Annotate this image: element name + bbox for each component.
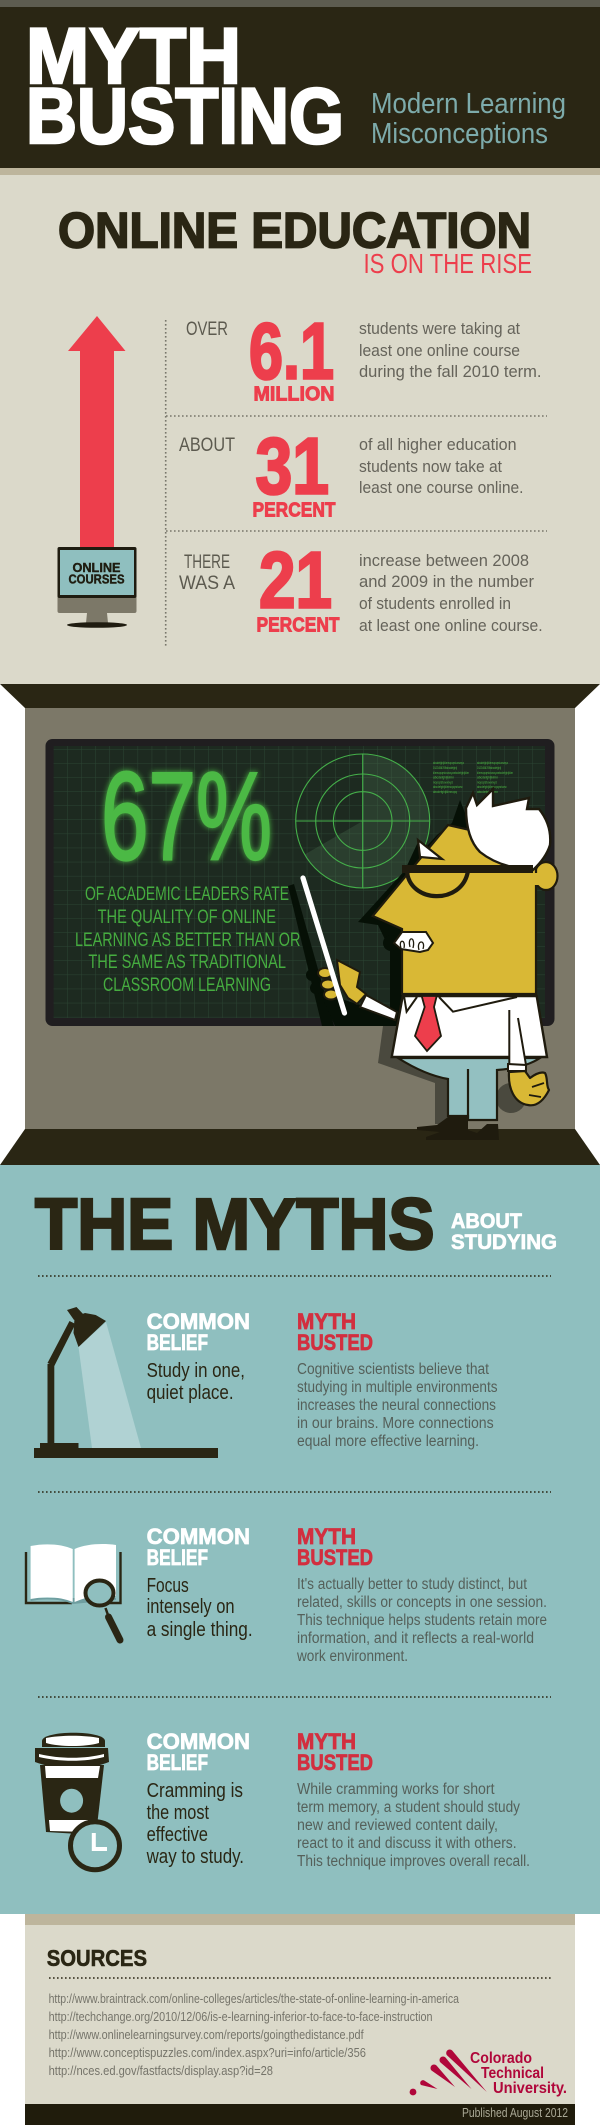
stat: 31 percent: ABOUT (179, 435, 235, 456)
title: BUSTING (26, 71, 344, 160)
busted text: work environment. (296, 1648, 408, 1665)
glasses (402, 865, 533, 896)
stat: 6.1 million: MILLION (254, 382, 334, 406)
busted text: increases the neural connections (297, 1397, 496, 1414)
small data text: abcdefghijklmn (477, 790, 498, 794)
arrow: rising (68, 316, 126, 548)
stat: 21 percent: and 2009 in the number (359, 573, 534, 591)
icon: coffee cup and clock (35, 1733, 120, 1870)
published date: Published August 2012 (462, 2105, 568, 2120)
belief text: effective (147, 1824, 208, 1846)
icon: desk lamp (34, 1307, 218, 1458)
subheading: about studying: ABOUT (451, 1210, 522, 1233)
stat: 31 percent: 31 (256, 422, 329, 510)
myth busted: MYTH (297, 1309, 356, 1334)
small data text: abcdefghijklmn (433, 776, 454, 780)
stat: 21 percent: PERCENT (256, 614, 340, 636)
stat: 6.1 million (186, 306, 542, 406)
head (373, 825, 536, 994)
panel: online education (0, 175, 600, 684)
ear (534, 862, 558, 890)
stat: 21 percent: of students enrolled in (359, 595, 511, 613)
icon: monitor (58, 547, 136, 628)
belief text: a single thing. (147, 1619, 253, 1641)
heading: the myths: THE MYTHS (35, 1185, 434, 1265)
small data text: abcdefghijklmnopq (433, 790, 457, 794)
source list (49, 1991, 460, 2078)
right sleeve (508, 1010, 526, 1071)
panel: myths (0, 1165, 600, 1914)
subheading: about studying (451, 1210, 557, 1254)
myth 1 (147, 1309, 498, 1450)
sources heading: SOURCES (47, 1945, 147, 1971)
logo: colorado technical university: Technical (481, 2065, 544, 2082)
stat: 6.1 million: least one online course (359, 342, 520, 360)
subtitle (371, 88, 566, 150)
myth busted: MYTH (297, 1524, 356, 1549)
board statement: LEARNING AS BETTER THAN OR (75, 930, 300, 951)
pointer stick (303, 878, 344, 1013)
radar (296, 754, 430, 888)
common belief (147, 1729, 250, 1775)
busted text: This technique improves overall recall. (297, 1853, 530, 1870)
common belief (147, 1309, 250, 1355)
eyebrow (418, 840, 442, 859)
myth 2 (147, 1524, 547, 1665)
shoes (417, 1117, 499, 1140)
shirt (392, 996, 547, 1057)
belief text: Cramming is (147, 1780, 243, 1802)
busted text: This technique helps students retain more (297, 1612, 547, 1629)
common belief: COMMON (147, 1729, 250, 1754)
busted text (297, 1781, 530, 1870)
stat: 6.1 million: OVER (186, 319, 228, 340)
busted text: new and reviewed content daily, (297, 1817, 498, 1834)
source list: http://www.braintrack.com/online-colleges/articles/the-state-of-online-learning-in-america (49, 1991, 460, 2006)
myth busted (297, 1729, 373, 1775)
blackboard (46, 739, 554, 1026)
busted text: term memory, a student should study (297, 1799, 520, 1816)
stat: 31 percent: of all higher education (359, 436, 517, 454)
stat: 31 percent: students now take at (359, 458, 502, 476)
stat: 31 percent: PERCENT (252, 498, 336, 522)
belief text (147, 1360, 245, 1404)
source list: http://techchange.org/2010/12/06/is-e-learning-inferior-to-face-to-face-instruction (49, 2009, 432, 2024)
myth busted (297, 1309, 373, 1355)
small data text: abcdefghijklmn (477, 776, 498, 780)
belief text: intensely on (147, 1596, 235, 1618)
board statement (75, 884, 300, 996)
myth 3 (146, 1729, 530, 1870)
small data text: nopqrstuvwxyz (433, 780, 453, 784)
stat: 21 percent: at least one online course. (359, 617, 543, 635)
title (26, 11, 344, 160)
small data text: klmnopqrstuvwxyzabcdefghijklm (433, 771, 469, 775)
source list: http://nces.ed.gov/fastfacts/display.asp?id=28 (49, 2063, 273, 2078)
common belief: BELIEF (147, 1330, 208, 1355)
board statement: THE QUALITY OF ONLINE (98, 907, 276, 928)
stat: 21 percent (179, 536, 543, 636)
left hand (318, 960, 366, 1004)
character: professor (288, 789, 558, 1140)
small data text (433, 761, 513, 794)
belief text (146, 1780, 244, 1868)
belief text: way to study. (146, 1846, 244, 1868)
small data text: 0123456789abcdefghij (433, 766, 457, 770)
busted text: While cramming works for short (297, 1781, 495, 1798)
small data text: abcdefghijklmnopqrstuvw (477, 785, 507, 789)
small data text: 0123456789abcdefghij (477, 766, 501, 770)
busted text: react to it and discuss it with others. (297, 1835, 517, 1852)
belief text (147, 1575, 253, 1641)
board statement: OF ACADEMIC LEADERS RATE (85, 884, 289, 905)
subheading: about studying: STUDYING (451, 1231, 557, 1254)
belief text: Focus (147, 1575, 189, 1597)
big number 67%: 67% (101, 748, 272, 886)
title: MYTH (26, 11, 241, 100)
stat: 31 percent: least one course online. (359, 479, 524, 497)
busted text: It's actually better to study distinct, but (297, 1576, 528, 1593)
belief text: quiet place. (147, 1382, 234, 1404)
icon: monitor: COURSES (68, 572, 124, 586)
logo: colorado technical university (410, 2049, 567, 2097)
right hand (509, 1071, 549, 1105)
logo: colorado technical university: University. (493, 2080, 567, 2097)
small data text: nopqrstuvwxyz (477, 780, 497, 784)
small data text: abcdefghijklmnopqrstuvwxyz (477, 761, 508, 765)
subtitle: Misconceptions (371, 118, 548, 150)
common belief: BELIEF (147, 1750, 208, 1775)
panel: classroom (0, 684, 600, 1165)
common belief (147, 1524, 250, 1570)
busted text (296, 1576, 547, 1665)
busted text: information, and it reflects a real-world (297, 1630, 534, 1647)
stat: 21 percent: increase between 2008 (359, 552, 529, 570)
stat: 6.1 million: during the fall 2010 term. (359, 363, 542, 381)
small data text: abcdefghijklmnopqrstuvw (433, 785, 463, 789)
small data text: abcdefghijklmnopqrstuvwxyz (433, 761, 464, 765)
busted text: in our brains. More connections (297, 1415, 494, 1432)
belief text: Study in one, (147, 1360, 245, 1382)
stat: 6.1 million: 6.1 (249, 306, 334, 396)
left sleeve (360, 995, 397, 1020)
icon: book and magnifier (26, 1544, 120, 1640)
myth busted: BUSTED (297, 1330, 373, 1355)
source list: http://www.conceptispuzzles.com/index.aspx?uri=info/article/356 (49, 2045, 366, 2060)
stat: 21 percent: 21 (259, 536, 332, 624)
busted text: studying in multiple environments (297, 1379, 498, 1396)
hair (466, 789, 550, 870)
subtitle: Modern Learning (371, 88, 566, 120)
busted text (297, 1361, 498, 1450)
belief text: the most (147, 1802, 209, 1824)
header band (0, 0, 600, 175)
heading: ONLINE EDUCATION (58, 202, 531, 258)
small data text: klmnopqrstuvwxyzabcdefghijklm (477, 771, 513, 775)
stat: 21 percent: WAS A (179, 573, 235, 594)
board statement: CLASSROOM LEARNING (103, 975, 271, 996)
logo: colorado technical university: Colorado (470, 2050, 532, 2067)
myth busted: MYTH (297, 1729, 356, 1754)
pants (398, 1058, 540, 1120)
busted text: equal more effective learning. (297, 1433, 479, 1450)
myth busted (297, 1524, 373, 1570)
busted text: Cognitive scientists believe that (297, 1361, 490, 1378)
myth busted: BUSTED (297, 1750, 373, 1775)
myth busted: BUSTED (297, 1545, 373, 1570)
necktie (415, 996, 441, 1051)
moustache (394, 932, 433, 952)
common belief: BELIEF (147, 1545, 208, 1570)
board statement: THE SAME AS TRADITIONAL (88, 952, 286, 973)
subheading: IS ON THE RISE (364, 248, 532, 279)
panel: sources (25, 1914, 575, 2125)
stat: 31 percent (179, 422, 524, 522)
stat: 21 percent: THERE (184, 552, 230, 573)
icon: monitor: ONLINE (72, 561, 120, 575)
busted text: related, skills or concepts in one session. (297, 1594, 547, 1611)
source list: http://www.onlinelearningsurvey.com/reports/goingthedistance.pdf (49, 2027, 364, 2042)
common belief: COMMON (147, 1309, 250, 1334)
stat: 6.1 million: students were taking at (359, 320, 520, 338)
common belief: COMMON (147, 1524, 250, 1549)
